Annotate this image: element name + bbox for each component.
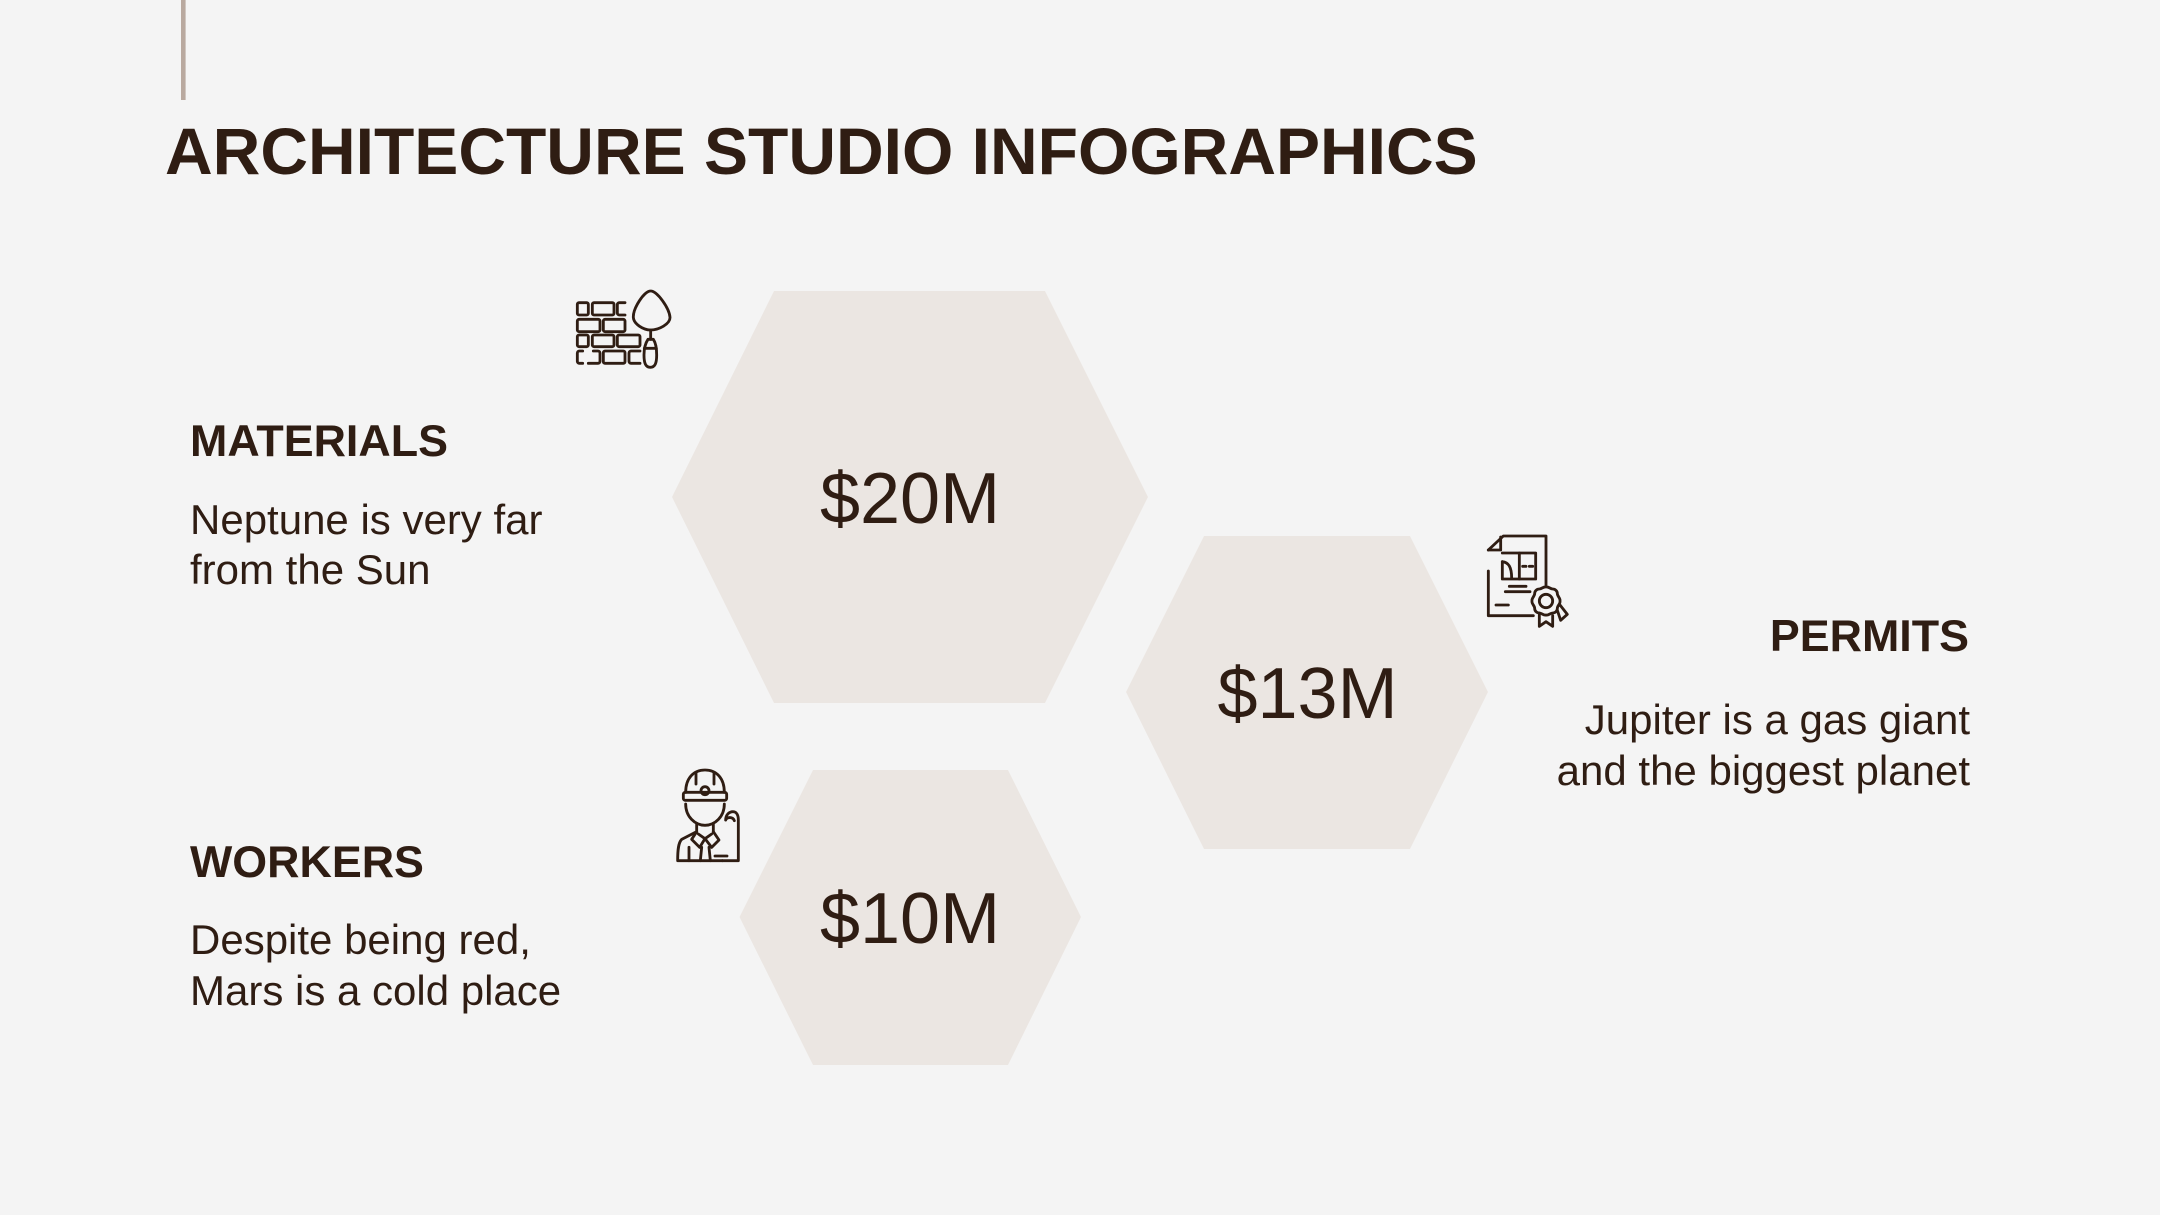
description: materials (190, 496, 542, 593)
text block: materials (190, 416, 542, 593)
heading: permits: PERMITS (1770, 611, 1969, 661)
heading: workers: WORKERS (190, 837, 424, 887)
description: permits (1557, 696, 1970, 794)
hexagon: workers (740, 770, 1081, 1065)
description: workers: Despite being red, (190, 916, 531, 963)
hexagon: permits (1126, 536, 1488, 849)
description: workers: Mars is a cold place (190, 967, 561, 1014)
title: ARCHITECTURE STUDIO INFOGRAPHICS (165, 114, 1478, 188)
description: materials: from the Sun (190, 546, 430, 593)
text block: permits (1557, 611, 1970, 794)
hexagon: materials (672, 291, 1148, 703)
text block: workers (190, 837, 561, 1014)
icon: bricks and trowel (577, 291, 670, 367)
description: permits: Jupiter is a gas giant (1585, 696, 1970, 743)
heading: materials: MATERIALS (190, 416, 448, 466)
icon: construction worker (678, 770, 738, 861)
value: $13M: $13M (1217, 654, 1398, 734)
icon: certified blueprint (1488, 536, 1567, 626)
description: permits: and the biggest planet (1557, 747, 1970, 794)
description: workers (190, 916, 561, 1014)
accent line (181, 0, 186, 100)
description: materials: Neptune is very far (190, 496, 542, 542)
value: $20M: $20M (820, 458, 1000, 538)
value: $10M: $10M (820, 879, 1000, 959)
